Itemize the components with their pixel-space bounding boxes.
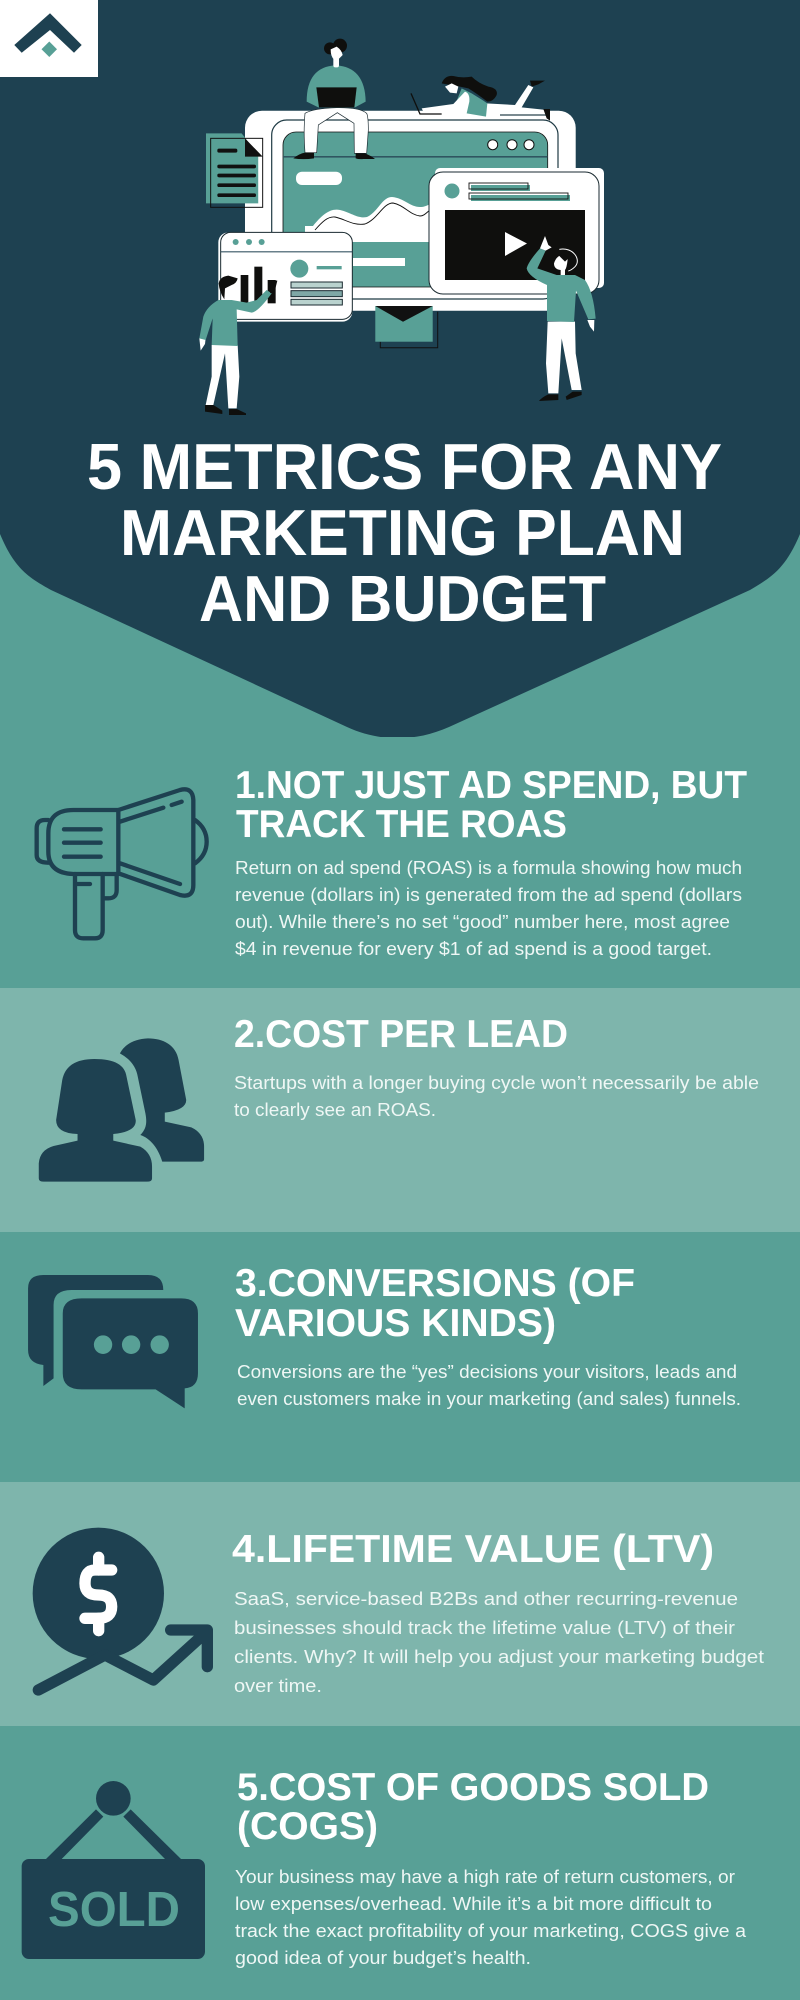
- heading: metric 4: 4.LIFETIME VALUE (LTV): [232, 1528, 714, 1571]
- text: metric 4 body: clients. Why? It will help you adjust your marketing budget: [234, 1647, 764, 1667]
- heading: metric 5: 5.COST OF GOODS SOLD: [237, 1766, 709, 1809]
- title: 5 METRICS FOR ANY: [87, 430, 722, 503]
- heading: metric 1: 1.NOT JUST AD SPEND, BUT: [235, 764, 747, 807]
- text: metric 4 body: SaaS, service-based B2Bs and other recurring-revenue: [234, 1589, 738, 1609]
- panel: metric 5 COGS: [0, 1726, 800, 2000]
- icon: dollar coin with rising arrow: [33, 1528, 207, 1690]
- text: metric 3 body: Conversions are the “yes” decisions your visitors, leads and: [237, 1362, 737, 1382]
- text: metric 5 body: good idea of your budget’s health.: [235, 1948, 531, 1968]
- text: metric 1 body: [235, 858, 742, 959]
- heading: metric 3: VARIOUS KINDS): [235, 1302, 556, 1345]
- text: metric 4 body: [234, 1589, 764, 1696]
- title: AND BUDGET: [199, 562, 606, 635]
- heading: metric 1: TRACK THE ROAS: [236, 803, 567, 846]
- panel: header background: [0, 0, 800, 738]
- text: metric 5 body: [235, 1867, 747, 1968]
- main monitor: [245, 111, 576, 311]
- icon: megaphone: [37, 789, 207, 938]
- text: metric 3 body: [237, 1362, 741, 1409]
- icon: sold sign: SOLD: [48, 1883, 180, 1937]
- person pointing at chart: [199, 276, 277, 415]
- text: metric 1 body: Return on ad spend (ROAS) is a formula showing how much: [235, 858, 742, 878]
- text: metric 3 body: even customers make in your marketing (and sales) funnels.: [237, 1389, 741, 1409]
- title: MARKETING PLAN: [120, 496, 685, 569]
- text: metric 5 body: low expenses/overhead. While it’s a bit more difficult to: [235, 1894, 712, 1914]
- title: [87, 430, 722, 635]
- illustration: marketing team around screens: [199, 39, 604, 415]
- text: metric 1 body: $4 in revenue for every $1 of ad spend is a good target.: [235, 939, 712, 959]
- text: metric 5 body: Your business may have a high rate of return customers, or: [235, 1867, 735, 1887]
- chart window: [218, 232, 352, 322]
- logo: [0, 0, 98, 77]
- text: metric 1 body: revenue (dollars in) is generated from the ad spend (dollars: [235, 885, 742, 905]
- person lying on monitor: [411, 76, 550, 121]
- video window: [429, 168, 604, 294]
- panel: metric 4 lifetime value: [0, 1482, 800, 1726]
- text: metric 5 body: track the exact profitability of your marketing, COGS give a: [235, 1921, 747, 1941]
- heading: metric 5: [237, 1766, 709, 1848]
- document: [206, 133, 263, 207]
- envelope: [375, 306, 438, 348]
- heading: metric 1: [235, 764, 747, 846]
- icon: two people: [39, 1038, 204, 1182]
- icon: sold sign: [22, 1781, 205, 1959]
- panel: metric 1 ROAS: [0, 737, 800, 988]
- person pointing at video: [527, 236, 596, 401]
- text: metric 2 body: [234, 1073, 759, 1120]
- text: metric 1 body: out). While there’s no set “good” number here, most agree: [235, 912, 730, 932]
- text: metric 4 body: businesses should track the lifetime value (LTV) of their: [234, 1618, 735, 1638]
- person sitting on monitor: [293, 39, 375, 159]
- text: metric 2 body: Startups with a longer buying cycle won’t necessarily be able: [234, 1073, 759, 1093]
- heading: metric 3: [235, 1262, 635, 1345]
- text: metric 4 body: over time.: [234, 1676, 322, 1696]
- heading: metric 3: 3.CONVERSIONS (OF: [235, 1262, 635, 1305]
- icon: chat bubbles: [28, 1275, 198, 1408]
- panel: metric 2 cost per lead: [0, 988, 800, 1232]
- panel: metric 3 conversions: [0, 1232, 800, 1482]
- heading: metric 2: 2.COST PER LEAD: [234, 1013, 568, 1056]
- text: metric 2 body: to clearly see an ROAS.: [234, 1100, 436, 1120]
- heading: metric 5: (COGS): [237, 1805, 378, 1848]
